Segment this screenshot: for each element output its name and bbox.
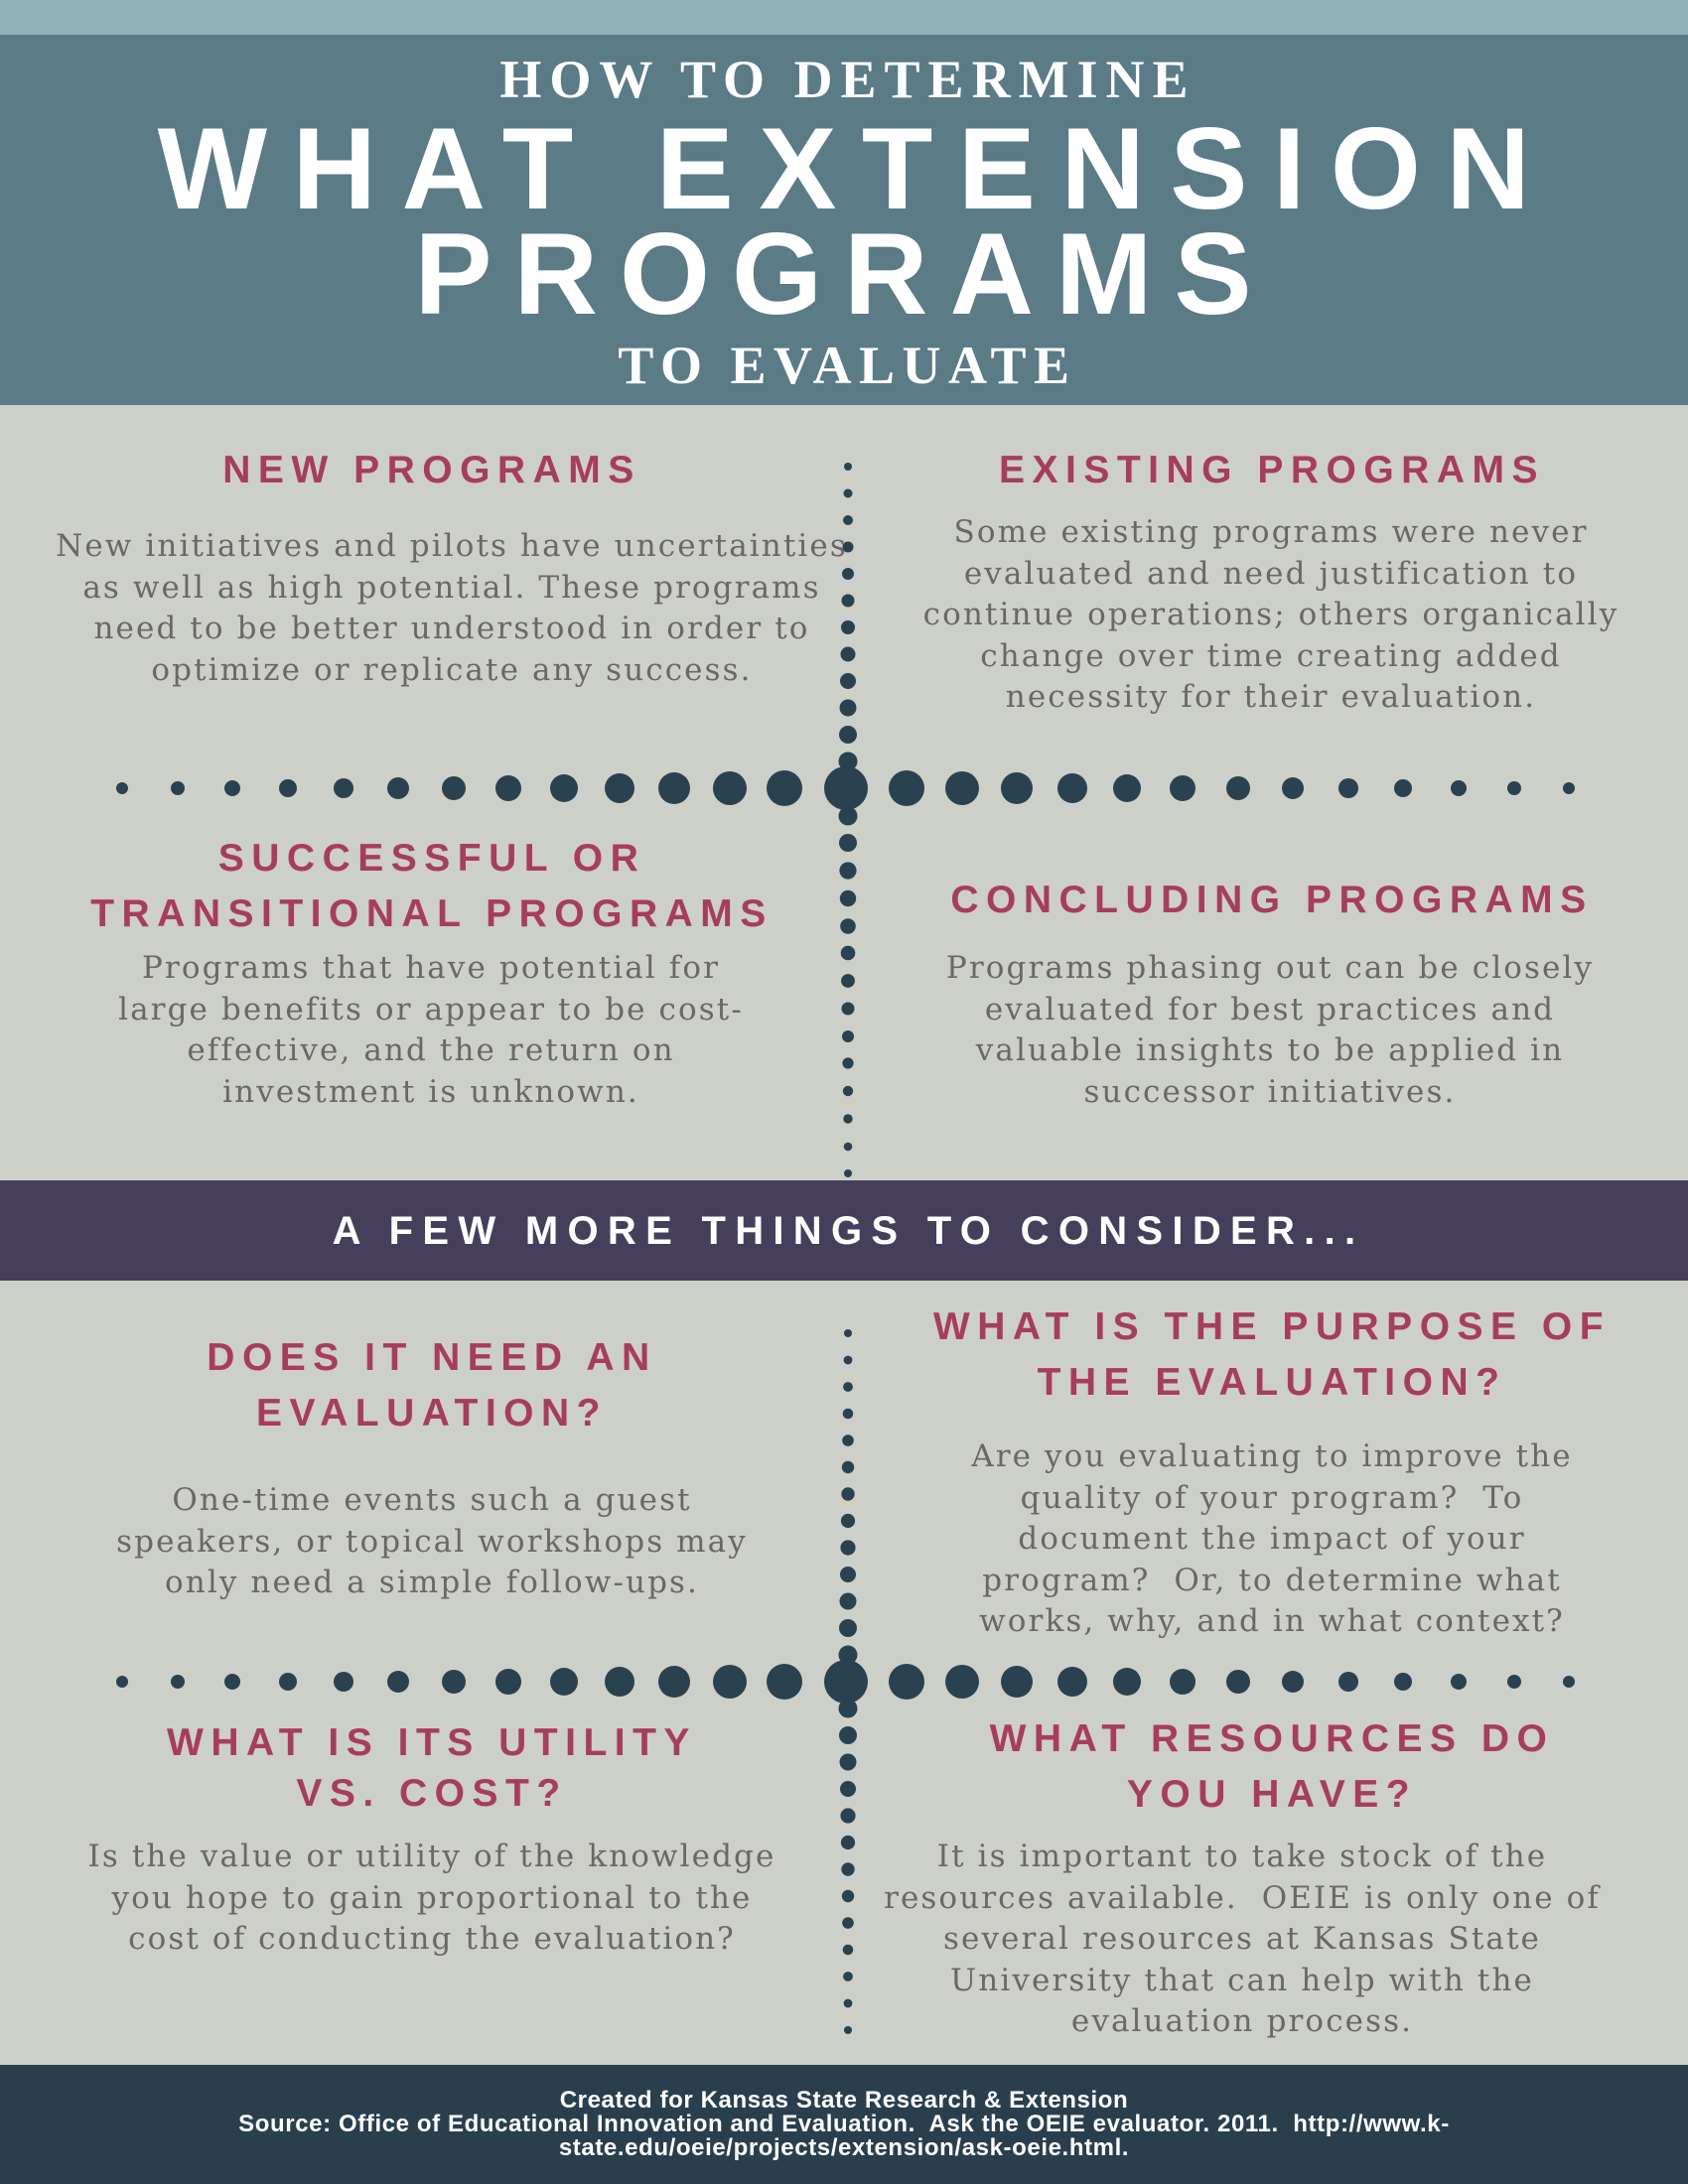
text: purpose of evaluation <box>971 1438 1573 1639</box>
heading: successful or transitional: TRANSITIONAL PROGRAMS <box>90 892 774 935</box>
text: utility vs cost: cost of conducting the evaluation? <box>128 1921 736 1957</box>
text: existing programs: change over time creating added <box>980 638 1562 674</box>
heading: resources <box>989 1717 1554 1816</box>
text: purpose of evaluation: quality of your program? To <box>1021 1480 1523 1516</box>
footer credits text: state.edu/oeie/projects/extension/ask-oeie.html. <box>559 2134 1129 2161</box>
text: concluding programs: evaluated for best practices and <box>985 992 1555 1027</box>
heading: concluding programs: CONCLUDING PROGRAMS <box>950 879 1594 921</box>
heading: utility vs cost <box>167 1721 697 1815</box>
text: existing programs: necessity for their evaluation. <box>1006 679 1536 715</box>
text: resources <box>884 1839 1601 2039</box>
dots: lower horizontal row <box>116 1660 1575 1704</box>
band: a few more things to consider: A FEW MORE THINGS TO CONSIDER... <box>333 1209 1364 1253</box>
title line 1: HOW TO DETERMINE <box>499 50 1196 109</box>
heading: purpose of evaluation <box>933 1305 1611 1404</box>
text: resources: University that can help with the <box>950 1963 1534 1998</box>
top strip <box>0 0 1688 35</box>
text: resources: several resources at Kansas State <box>943 1921 1541 1957</box>
heading: does it need an evaluation <box>207 1336 657 1434</box>
text: successful or transitional: large benefits or appear to be cost- <box>118 992 744 1027</box>
band: a few more things to consider <box>0 1180 1688 1281</box>
text: concluding programs: valuable insights to be applied in <box>976 1032 1564 1068</box>
footer credits text: Source: Office of Educational Innovation and Evaluation. Ask the OEIE evaluator. 2011. http://www.k- <box>238 2111 1450 2137</box>
text: new programs: as well as high potential. These programs <box>82 570 821 606</box>
text: successful or transitional: investment is unknown. <box>222 1074 639 1110</box>
text: existing programs: evaluated and need justification to <box>964 556 1578 592</box>
heading: resources: WHAT RESOURCES DO <box>990 1717 1554 1760</box>
text: purpose of evaluation: program? Or, to determine what <box>982 1563 1562 1598</box>
heading: existing programs: EXISTING PROGRAMS <box>999 449 1545 491</box>
text: does it need an evaluation: only need a simple follow-ups. <box>165 1565 699 1600</box>
text: utility vs cost: you hope to gain proportional to the <box>112 1880 752 1916</box>
heading: purpose of evaluation: WHAT IS THE PURPOSE OF <box>933 1305 1611 1348</box>
heading: purpose of evaluation: THE EVALUATION? <box>1038 1361 1506 1404</box>
text: does it need an evaluation <box>116 1482 748 1600</box>
dots: upper horizontal row <box>116 766 1575 810</box>
heading: resources: YOU HAVE? <box>1127 1773 1417 1816</box>
text: new programs: New initiatives and pilots have uncertainties <box>56 528 848 564</box>
text: purpose of evaluation: document the impact of your <box>1018 1521 1526 1557</box>
text: successful or transitional: effective, and the return on <box>187 1032 675 1068</box>
text: purpose of evaluation: Are you evaluating to improve the <box>971 1438 1573 1474</box>
heading: does it need an evaluation: EVALUATION? <box>256 1392 608 1434</box>
footer credits text <box>238 2087 1450 2161</box>
text: does it need an evaluation: speakers, or topical workshops may <box>116 1524 748 1560</box>
title line 3: PROGRAMS <box>414 208 1274 339</box>
heading: successful or transitional: SUCCESSFUL OR <box>218 837 645 880</box>
header panel <box>0 35 1688 405</box>
footer credits text: Created for Kansas State Research & Extension <box>560 2087 1128 2114</box>
text: successful or transitional: Programs that have potential for <box>142 950 720 986</box>
text: concluding programs: Programs phasing out can be closely <box>946 950 1594 986</box>
footer <box>0 2065 1688 2184</box>
dots: upper vertical column <box>838 463 858 1177</box>
heading: new programs: NEW PROGRAMS <box>222 449 641 491</box>
text: utility vs cost <box>88 1839 775 1957</box>
heading: does it need an evaluation: DOES IT NEED AN <box>207 1336 657 1379</box>
text: concluding programs <box>946 950 1594 1110</box>
text: existing programs <box>923 514 1618 715</box>
text: successful or transitional <box>118 950 744 1110</box>
text: existing programs: continue operations; others organically <box>923 597 1618 632</box>
heading: successful or transitional <box>90 837 774 935</box>
text: utility vs cost: Is the value or utility of the knowledge <box>88 1839 775 1874</box>
heading: utility vs cost: VS. COST? <box>296 1772 568 1815</box>
text: resources: resources available. OEIE is only one of <box>884 1880 1601 1916</box>
text: concluding programs: successor initiatives. <box>1084 1074 1456 1110</box>
title line 2: WHAT EXTENSION <box>158 103 1555 233</box>
heading: utility vs cost: WHAT IS ITS UTILITY <box>167 1721 697 1764</box>
dots: lower vertical column <box>838 1329 858 2034</box>
text: new programs: optimize or replicate any success. <box>151 652 753 688</box>
text: resources: evaluation process. <box>1071 2003 1413 2039</box>
title line 4: TO EVALUATE <box>618 336 1077 395</box>
text: does it need an evaluation: One-time events such a guest <box>172 1482 692 1518</box>
text: existing programs: Some existing programs were never <box>953 514 1589 550</box>
text: new programs <box>56 528 848 688</box>
text: purpose of evaluation: works, why, and in what context? <box>979 1603 1565 1639</box>
text: resources: It is important to take stock of the <box>937 1839 1547 1874</box>
text: new programs: need to be better understood in order to <box>93 611 810 646</box>
